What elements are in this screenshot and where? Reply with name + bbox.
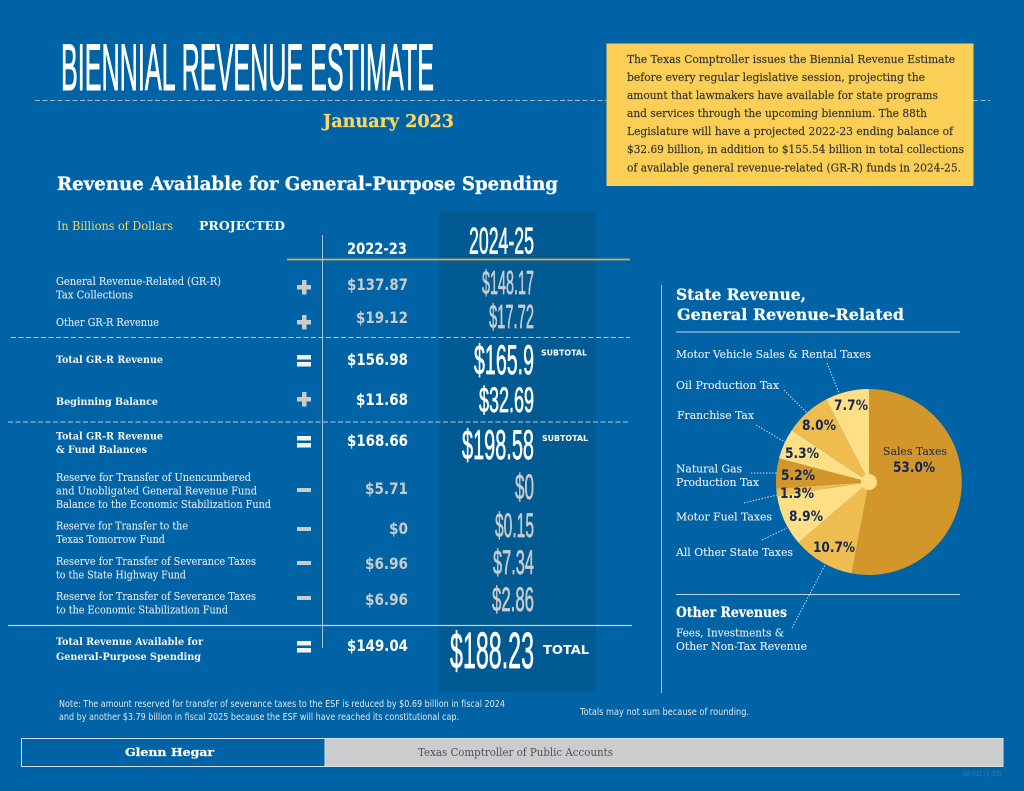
panel: intro callout: [606, 44, 974, 186]
text: $0.15: [495, 507, 534, 545]
pie chart: 8.0%: [802, 418, 836, 434]
pie chart: 8.9%: [789, 509, 823, 525]
text: $198.58: [462, 421, 534, 468]
values 2022-23: $5.71: [365, 479, 408, 498]
row labels: Beginning Balance: [56, 396, 158, 408]
pie chart: Sales Taxes: [883, 444, 947, 458]
row labels: Reserve for Transfer to the: [56, 520, 188, 532]
subtotal tag 2: SUBTOTAL: [542, 434, 588, 443]
row labels: & Fund Balances: [56, 444, 147, 456]
heading: revenue available: Revenue Available for General-Purpose Spending: [57, 173, 558, 195]
row labels: and Unobligated General Revenue Fund: [56, 484, 257, 498]
heading: state revenue: State Revenue,: [676, 285, 806, 304]
values 2022-23: $156.98: [347, 350, 408, 369]
values 2022-23: $19.12: [356, 308, 408, 327]
values 2022-23: $11.68: [356, 390, 408, 409]
values 2024-25: $32.69: [479, 381, 534, 420]
row labels: [56, 275, 271, 663]
text: $188.23: [450, 622, 534, 679]
pie chart: 53.0%: [893, 460, 935, 476]
row labels: Total GR-R Revenue: [56, 430, 163, 442]
pie chart: [776, 389, 962, 575]
pie leader lines: [744, 363, 839, 628]
values 2022-23: $6.96: [365, 554, 408, 573]
panel: intro callout: of available general revenue-related (GR-R) funds in 2024-25.: [627, 160, 961, 174]
row labels: Balance to the Economic Stabilization Fund: [56, 498, 271, 511]
total tag: TOTAL: [543, 642, 589, 657]
pie category labels: Production Tax: [676, 475, 759, 489]
pie chart: 7.7%: [834, 398, 868, 414]
pie category labels: All Other State Taxes: [675, 545, 793, 559]
text: 2024-25: [469, 220, 534, 262]
panel: intro callout: $32.69 billion, in addition to $155.54 billion in total collections: [627, 142, 964, 156]
text: $17.72: [489, 298, 534, 335]
row labels: to the State Highway Fund: [56, 568, 186, 582]
other revenues block: Fees, Investments &: [676, 626, 784, 640]
panel: intro callout: The Texas Comptroller issues the Biennial Revenue Estimate: [627, 52, 955, 66]
other revenues block: Other Non-Tax Revenue: [676, 639, 807, 653]
values 2024-25: [450, 264, 534, 679]
column header 2022-23: 2022-23: [347, 239, 407, 258]
pie category labels: Oil Production Tax: [676, 378, 779, 392]
values 2022-23: $137.87: [347, 275, 408, 294]
pie category labels: Motor Vehicle Sales & Rental Taxes: [676, 347, 871, 361]
footer bar: [22, 738, 1003, 767]
pie chart: 5.2%: [781, 468, 815, 484]
pie category labels: Motor Fuel Taxes: [676, 510, 772, 524]
row labels: Reserve for Transfer of Severance Taxes: [56, 555, 256, 568]
footnote: and by another $3.79 billion in fiscal 2025 because the ESF will have reached its constitutional cap.: [59, 712, 459, 723]
pie category labels: Natural Gas: [676, 462, 742, 476]
text: BIENNIAL REVENUE ESTIMATE: [61, 30, 434, 104]
values 2022-23: $6.96: [365, 590, 408, 609]
pie chart: 5.3%: [785, 446, 819, 462]
subtotal tag 1: SUBTOTAL: [541, 348, 587, 358]
panel: intro callout: and services through the upcoming biennium. The 88th: [627, 106, 928, 120]
pie category labels: Franchise Tax: [677, 408, 754, 422]
values 2022-23: [347, 275, 408, 655]
other revenues block: [676, 605, 807, 653]
values 2022-23: $0: [389, 519, 408, 538]
heading: state revenue: General Revenue-Related: [677, 305, 904, 324]
other revenues block: Other Revenues: [676, 605, 787, 621]
panel: intro callout: amount that lawmakers have available for state programs: [627, 88, 938, 102]
text: $148.17: [482, 264, 534, 301]
date subtitle: January 2023: [321, 112, 454, 132]
row labels: Reserve for Transfer of Severance Taxes: [56, 590, 256, 603]
projected label: PROJECTED: [199, 218, 285, 233]
row labels: Other GR-R Revenue: [56, 316, 159, 329]
text: $2.86: [492, 581, 534, 619]
heading: state revenue: [676, 285, 904, 324]
text: $165.9: [474, 336, 534, 383]
publication code: 98-011 (1-23): [963, 771, 1001, 778]
row labels: to the Economic Stabilization Fund: [56, 604, 228, 616]
row labels: Total GR-R Revenue: [56, 354, 163, 366]
row labels: Tax Collections: [56, 288, 133, 302]
dark highlight column for 2024-25: [439, 211, 596, 692]
footnote: Note: The amount reserved for transfer of severance taxes to the ESF is reduced by $0.69 billion in fiscal 2024: [59, 699, 505, 710]
row labels: General-Purpose Spending: [56, 651, 202, 663]
pie chart: 10.7%: [813, 540, 855, 556]
panel: intro callout: Legislature will have a projected 2022-23 ending balance of: [627, 124, 954, 138]
row labels: Reserve for Transfer of Unencumbered: [56, 471, 251, 484]
rounding note: Totals may not sum because of rounding.: [579, 707, 749, 718]
text: $7.34: [493, 544, 534, 582]
values 2022-23: $149.04: [347, 636, 408, 655]
footer bar: Texas Comptroller of Public Accounts: [418, 745, 613, 759]
row labels: Total Revenue Available for: [56, 636, 203, 648]
units note: In Billions of Dollars: [57, 219, 173, 233]
footnote: [59, 699, 505, 723]
row labels: General Revenue-Related (GR-R): [56, 275, 221, 288]
text: $0: [515, 468, 534, 507]
row labels: Texas Tomorrow Fund: [56, 533, 165, 546]
pie chart: 1.3%: [780, 486, 814, 502]
panel: intro callout: before every regular legislative session, projecting the: [627, 70, 925, 84]
operator symbols: [297, 280, 311, 652]
footer bar: Glenn Hegar: [125, 745, 215, 759]
values 2022-23: $168.66: [347, 431, 408, 450]
pie category labels: [675, 347, 871, 559]
